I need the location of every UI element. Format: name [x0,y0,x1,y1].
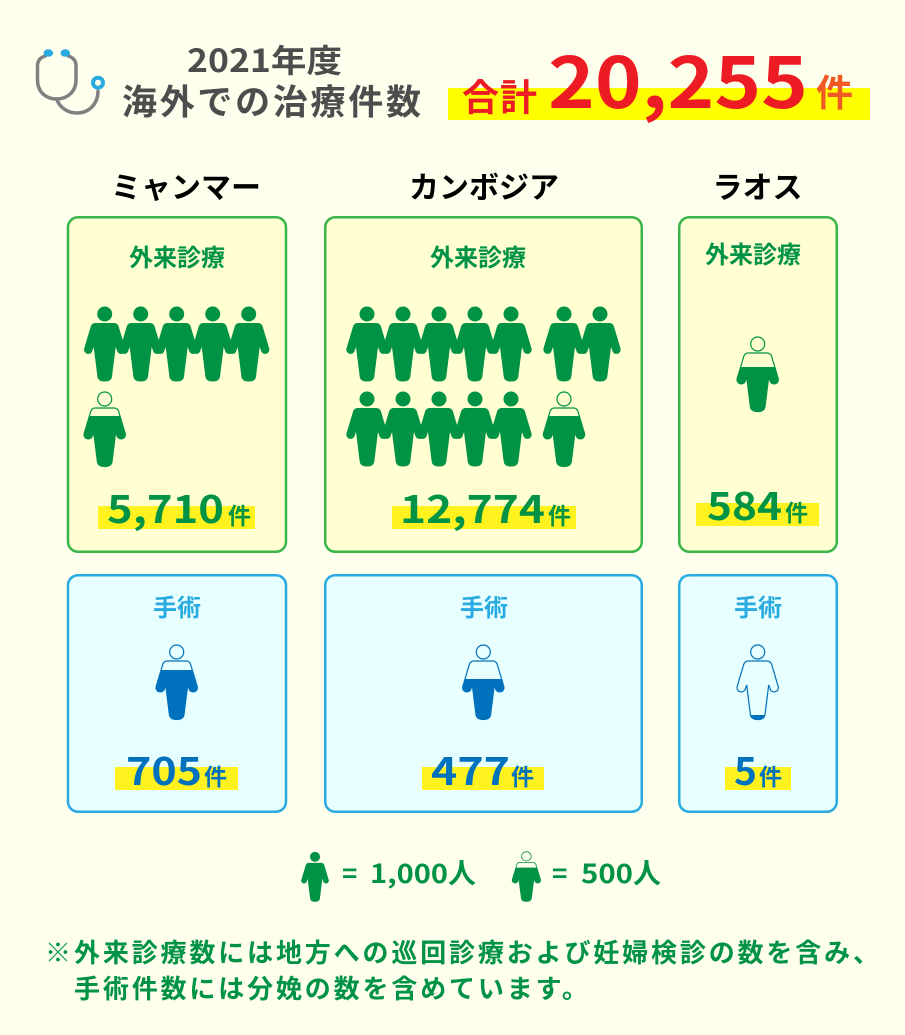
pictogram: Cambodia outpatient [346,306,621,466]
total count: 合計 [462,68,537,122]
footnote [45,933,882,1006]
heading: Laos: ラオス [712,163,802,207]
count: Laos surgery: 件 [759,758,782,792]
total count: 20,255 [548,28,808,129]
footnote: ※ [45,933,74,970]
count: Cambodia surgery: 477 [431,741,510,796]
pictogram: Cambodia surgery [463,645,504,720]
panel: Cambodia outpatient [325,217,642,552]
legend: 1,000 people: 人 [448,852,476,892]
total count [448,28,870,129]
count: Myanmar outpatient [98,479,255,534]
panel: Myanmar surgery [68,575,286,812]
pictogram: Myanmar surgery [156,645,197,720]
count: Cambodia outpatient: 12,774 [400,479,545,534]
count: Cambodia surgery [422,741,544,796]
legend: 1,000 people [301,852,476,902]
count: Myanmar surgery: 件 [204,758,227,792]
Myanmar outpatient heading: 外来診療 [129,238,225,273]
footnote: 手術件数には分娩の数を含めています。 [74,969,591,1006]
panel: Cambodia surgery [325,575,642,812]
legend: 1,000 people: = [342,854,357,891]
count: Myanmar outpatient: 5,710 [107,479,224,534]
count: Cambodia surgery: 件 [511,758,534,792]
legend: 500 people: = [552,854,567,891]
panel: Laos surgery [679,575,837,812]
Laos surgery heading: 手術 [734,588,782,623]
count: Cambodia outpatient [392,479,576,534]
pictogram: Laos surgery [737,645,778,720]
title: 海外での治療件数 [122,74,421,126]
Myanmar surgery heading: 手術 [153,588,201,623]
count: Laos outpatient: 584 [707,476,782,531]
legend: 500 people [512,852,661,901]
pictogram: Myanmar outpatient [84,306,269,466]
count: Myanmar surgery [115,741,238,796]
Laos outpatient heading: 外来診療 [705,235,801,270]
count: Laos outpatient [696,476,819,531]
count: Myanmar surgery: 705 [126,741,202,796]
panel: Myanmar outpatient [68,217,286,552]
legend: 500 people: 人 [633,852,661,892]
panel: Laos outpatient [679,217,837,552]
pictogram: Laos outpatient [737,337,778,412]
count: Laos surgery [725,741,791,796]
count: Cambodia outpatient: 件 [548,497,571,531]
icon: stethoscope [38,49,103,113]
legend: 500 people: 500 [581,854,633,891]
count: Laos surgery: 5 [734,741,757,796]
footnote: 外来診療数には地方への巡回診療および妊婦検診の数を含み、 [74,933,882,970]
count: Myanmar outpatient: 件 [228,497,251,531]
total count: 件 [816,63,853,117]
Cambodia surgery heading: 手術 [460,588,508,623]
count: Laos outpatient: 件 [785,494,808,528]
title [122,36,421,126]
Cambodia outpatient heading: 外来診療 [430,238,526,273]
title: 2021年度 [187,36,342,82]
heading: Cambodia: カンボジア [409,163,559,207]
heading: Myanmar: ミャンマー [111,163,261,207]
legend: 1,000 people: 1,000 [370,854,448,891]
